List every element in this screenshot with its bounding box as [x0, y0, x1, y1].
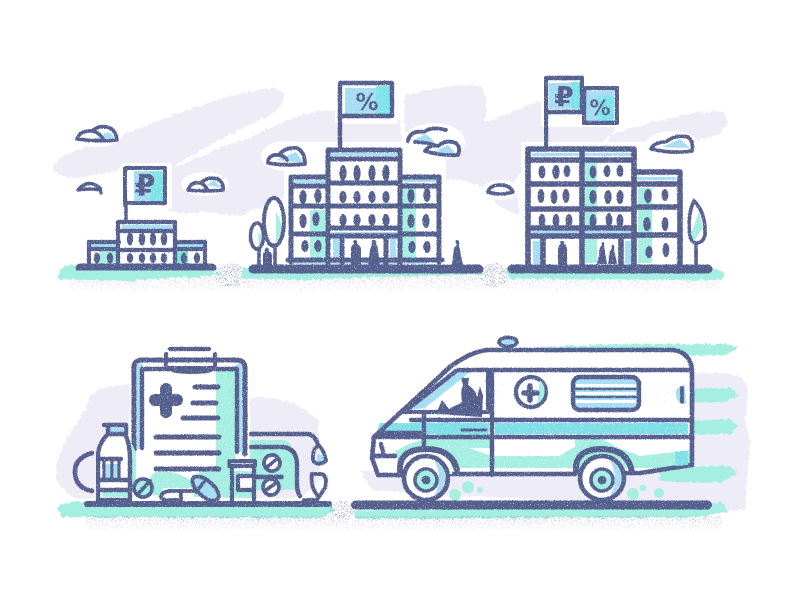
clouds: [71, 121, 699, 200]
background: top lavender brush strokes: [53, 85, 727, 216]
tree: [689, 201, 705, 243]
speed stripes: [540, 344, 740, 483]
ground line: [351, 500, 712, 510]
background: speckled ground dots, top row: [70, 263, 720, 294]
cloud 6: [645, 131, 699, 159]
background: lower lavender blobs: [56, 370, 750, 512]
cross on form: [155, 389, 177, 412]
cyan stripes: [376, 423, 688, 434]
pills: [134, 476, 219, 501]
vent window: [573, 377, 639, 410]
building: small bank with ruble flag: [80, 163, 212, 268]
people in doorway: [351, 240, 380, 266]
pill packs: [254, 455, 282, 495]
centre block and wings: [80, 222, 212, 268]
bottle: [98, 425, 136, 500]
ground line: [84, 501, 332, 507]
beacon: [499, 337, 517, 347]
rear wheel: [576, 449, 632, 500]
flag: percent: %: [355, 90, 379, 116]
flag: ruble: [546, 78, 582, 148]
building: medium bank with percent flag: [250, 77, 479, 269]
flag: percent: %: [589, 96, 611, 120]
cloud 2: [73, 178, 107, 198]
ground: mint strip under first building: [58, 265, 222, 281]
cloud 7: [482, 180, 518, 200]
ground: mint strip and speckles: [58, 502, 336, 518]
tall block and wings: [250, 150, 479, 269]
cross badge: [516, 377, 546, 407]
outline: [372, 350, 692, 475]
front wheel: [400, 449, 457, 500]
window glass: [405, 372, 486, 417]
cloud 5: [403, 123, 465, 161]
cloud 4: [261, 141, 311, 171]
jar: [229, 461, 256, 501]
flag: ruble: ₽: [554, 80, 574, 113]
ground strip and speckles: [352, 502, 728, 519]
ground: mint strip under third building: [505, 268, 726, 280]
panel: clipboard, medicines and stethoscope: [58, 349, 354, 532]
mint body wash: [395, 438, 690, 468]
form lines: [156, 387, 219, 469]
trees: [264, 198, 284, 246]
cloud 3: [181, 172, 229, 196]
people outside: [263, 240, 463, 266]
people in doorway: [558, 241, 617, 266]
flag: ruble: ₽: [135, 169, 155, 204]
van body: [372, 337, 692, 475]
ground: mint strip under second building: [240, 268, 486, 280]
dust puffs: [449, 481, 664, 501]
stethoscope: [75, 434, 326, 500]
panel: ambulance: [351, 337, 740, 532]
clipboard: [134, 349, 245, 498]
flag: percent: [584, 88, 617, 123]
flag: percent: [340, 83, 392, 149]
building: large bank with ruble and percent flags: [512, 73, 708, 269]
cloud 1: [71, 121, 123, 147]
block and wing: [512, 149, 708, 269]
